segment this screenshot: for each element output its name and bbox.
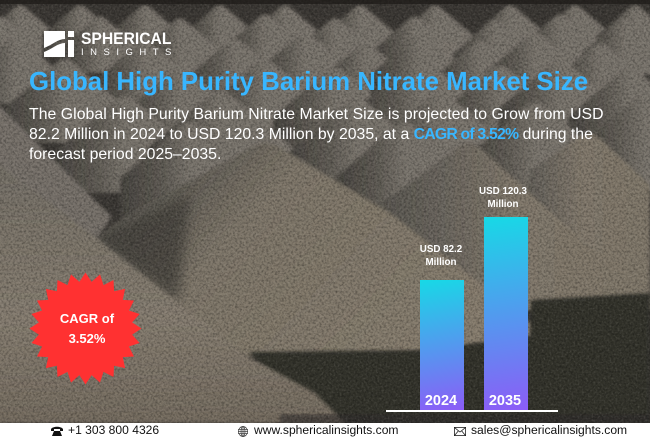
icon: telephone bbox=[51, 426, 63, 436]
badge text bbox=[60, 311, 114, 346]
bar label 2024: 2024 bbox=[425, 393, 457, 409]
contact: email: sales@sphericalinsights.com bbox=[471, 423, 627, 437]
axis line bbox=[386, 410, 558, 412]
bar 2024 bbox=[420, 280, 464, 410]
icon: envelope bbox=[454, 427, 466, 436]
contact: website: www.sphericalinsights.com bbox=[254, 423, 399, 437]
logo wordmark: INSIGHTS bbox=[81, 47, 178, 58]
badge text: CAGR of bbox=[60, 311, 114, 326]
far right pile bbox=[500, 134, 650, 300]
badge starburst bbox=[30, 272, 142, 384]
description text bbox=[29, 106, 604, 163]
contact: phone: +1 303 800 4326 bbox=[68, 423, 159, 437]
value label 2024 bbox=[420, 244, 462, 268]
footer bar bbox=[0, 423, 650, 440]
value label 2035 bbox=[479, 186, 527, 210]
description text: The Global High Purity Barium Nitrate Market Size is projected to Grow from USD bbox=[29, 106, 604, 123]
title: Global High Purity Barium Nitrate Market Size bbox=[29, 68, 588, 96]
description text: 82.2 Million in 2024 to USD 120.3 Million by 2035, at a CAGR of 3.52% during the bbox=[29, 126, 593, 143]
front left pile bbox=[0, 160, 345, 423]
ground bbox=[249, 293, 650, 423]
icon: globe bbox=[238, 426, 248, 437]
bar 2035 bbox=[484, 217, 528, 410]
logo: Spherical Insights bbox=[44, 29, 178, 58]
bar chart bbox=[386, 186, 558, 412]
badge text: 3.52% bbox=[69, 330, 105, 346]
value label 2035: Million bbox=[487, 199, 519, 210]
value label 2035: USD 120.3 bbox=[479, 186, 527, 197]
logo mark bbox=[44, 31, 74, 57]
value label 2024: Million bbox=[425, 257, 457, 268]
second pile bbox=[60, 142, 560, 356]
logo wordmark: SPHERICAL bbox=[81, 29, 171, 48]
value label 2024: USD 82.2 bbox=[420, 244, 462, 255]
description text: forecast period 2025–2035. bbox=[29, 146, 221, 163]
logo wordmark bbox=[81, 29, 178, 58]
third pile bbox=[360, 143, 650, 310]
CAGR badge bbox=[30, 272, 142, 384]
bar label 2035: 2035 bbox=[489, 393, 521, 409]
